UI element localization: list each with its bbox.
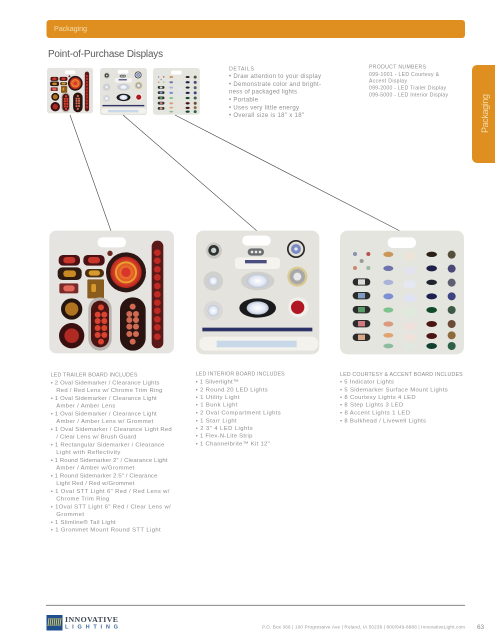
list: LED interior board includes: • 1 Flex-N-Lite Strip [196,434,253,440]
list: LED courtesy and accent board includes [340,372,463,424]
list: LED trailer board includes: Amber / Amber w/Grommet [56,466,135,472]
logo: Innovative Lighting [46,615,118,630]
header bar [46,20,465,38]
list: LED interior board includes: • 1 Utility Light [196,395,240,401]
list: LED courtesy and accent board includes: • 8 Courtesy Lights 4 LED [340,395,416,401]
footer rule [46,604,465,606]
list: LED interior board includes: • 1 Channelbrite™ Kit 12" [196,441,270,448]
details text block: ness of packaged lights [229,90,297,96]
list: LED courtesy and accent board includes: • 8 Accent Lights 1 LED [340,410,410,416]
board photo: LED courtesy and accent board [340,231,464,354]
thumbnail: LED courtesy board [153,68,200,115]
list: LED trailer board includes: • 1 Grommet Mount Round STT Light [51,528,161,534]
list: LED trailer board includes: • 2 Oval Sidemarker / Clearance Lights [51,380,159,386]
side tab [472,65,495,163]
footer contact line: P.O. Box 366 | 100 Progressive Ave | Roland, IA 50236 | 800/949-8888 | InnovativeLight.com [262,624,465,630]
details text block: • Draw attention to your display [229,74,321,80]
thumbnail: LED interior board [100,68,147,115]
list: LED trailer board includes: • 1 Slimline® Tail Light [51,519,116,526]
details text block: • Portable [229,97,259,103]
list: LED courtesy and accent board includes: • 5 Indicator Lights [340,380,394,386]
list: LED courtesy and accent board includes: LED COURTESY & ACCENT BOARD INCLUDES [340,372,463,378]
list: LED trailer board includes: LED TRAILER BOARD INCLUDES [51,373,138,379]
details text block: DETAILS [229,66,254,72]
list: LED trailer board includes: • 1 Oval STT Light 6" Red / Red Lens w/ [51,489,170,495]
list: LED trailer board includes: Chrome Trim Ring [56,497,109,503]
list: LED interior board includes: • 1 Bunk Light [196,403,238,409]
details text block: • Demonstrate color and bright- [229,82,321,88]
details text block [229,66,321,119]
list: LED interior board includes: LED INTERIOR BOARD INCLUDES [196,372,285,378]
details text block: • Overall size is 18" x 18" [229,113,304,119]
list: LED interior board includes: • 1 Starr Light [196,418,237,424]
list: LED trailer board includes: • 1Oval STT Light 6" Red / Clear Lens w/ [51,504,171,510]
header label: Packaging [54,24,87,33]
list: LED trailer board includes: Red / Red Lens w/ Chrome Trim Ring [56,388,162,394]
board photo: LED interior board [196,231,319,354]
list: LED courtesy and accent board includes: • 5 Sidemarker Surface Mount Lights [340,387,448,393]
list: LED trailer board includes: • 1 Rectangular Sidemarker / Clearance [51,442,165,448]
logo: Innovative Lighting: LIGHTING [65,624,118,630]
list: LED trailer board includes: • 1 Oval Sidemarker / Clearance Light [51,412,157,418]
details text block: • Uses very little energy [229,105,299,111]
list: LED trailer board includes: Light with Reflectivity [56,450,120,456]
list: LED courtesy and accent board includes: • 8 Bulkhead / Livewell Lights [340,418,426,424]
side tab label: Packaging [480,94,490,133]
list: LED courtesy and accent board includes: • 8 Step Lights 3 LED [340,403,403,409]
list: LED trailer board includes: / Clear Lens w/ Brush Guard [56,435,136,441]
connector line: courtesy board [175,115,400,231]
product numbers text block: 099-2000 - LED Trailer Display [369,85,446,91]
list: LED interior board includes [196,372,285,448]
logo: Innovative Lighting: INNOVATIVE [65,615,118,624]
list: LED trailer board includes: • 1 Round Sidemarker 2" / Clearance Light [51,458,168,464]
board photo: LED trailer board [49,231,174,353]
title: Point-of-Purchase Displays [48,49,163,60]
list: LED interior board includes: • 2 3" 4 LED Lights [196,426,253,432]
list: LED trailer board includes: Grommet [56,512,84,518]
list: LED trailer board includes [51,373,172,534]
product numbers text block: Accent Display [369,79,407,85]
list: LED trailer board includes: Amber / Amber Lens w/ Grommet [56,419,154,425]
list: LED trailer board includes: • 1 Oval Sidemarker / Clearance Light [51,396,157,402]
thumbnail: LED trailer board [47,68,93,113]
list: LED trailer board includes: Amber / Amber Lens [56,404,115,410]
list: LED interior board includes: • 2 Round 20 LED Lights [196,387,268,393]
list: LED trailer board includes: Light Red / Red w/Grommet [56,481,135,487]
product numbers text block [369,65,448,98]
list: LED interior board includes: • 1 Silverlight™ [196,379,239,386]
product numbers text block: PRODUCT NUMBERS [369,65,427,71]
list: LED trailer board includes: • 1 Oval Sidemarker / Clearance Light Red [51,427,172,433]
list: LED trailer board includes: • 1 Round Sidemarker 2.5" / Clearance [51,474,158,480]
product numbers text block: 099-5000 - LED Interior Display [369,92,448,98]
connector line: interior board [123,115,257,231]
page number: 63 [477,624,485,631]
connector line: trailer board [70,115,111,231]
product numbers text block: 099-1001 - LED Courtesy & [369,72,440,78]
list: LED interior board includes: • 2 Oval Compartment Lights [196,410,281,416]
